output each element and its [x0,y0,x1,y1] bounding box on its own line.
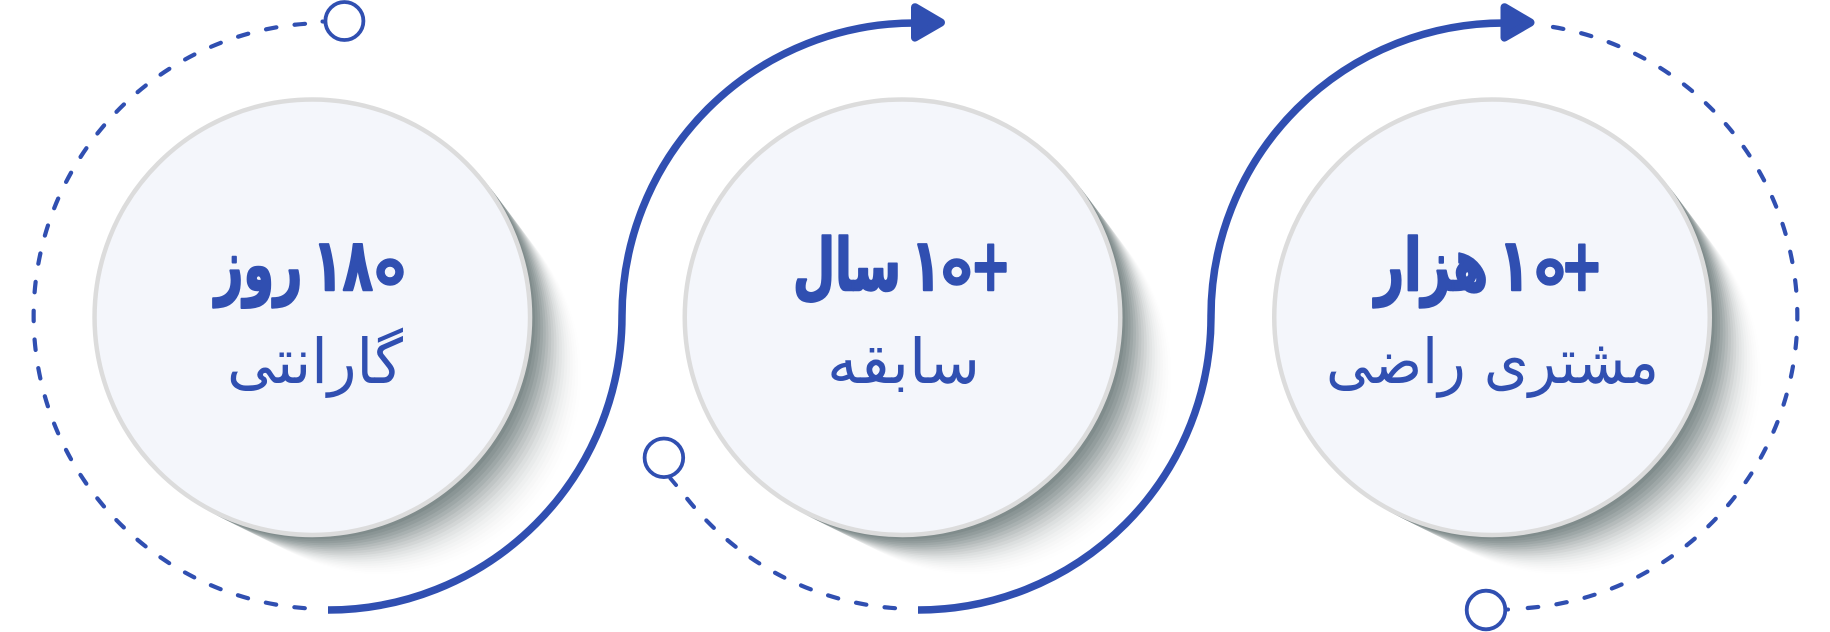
stat label: guarantee: گارانتی [227,325,403,398]
circle disc [95,99,530,535]
digit zero ring [947,262,966,282]
dashed arc: left loop with start node [34,2,363,608]
circle shadow [688,102,1171,574]
digit zero ring [1540,262,1560,282]
circle disc [1274,99,1710,535]
circle disc [685,99,1120,535]
panel: 10+ thousand satisfied customers [1274,99,1761,574]
arrow: solid S-curve from second to third loop [918,7,1530,610]
stat label: satisfied customers: مشتری راضی [1326,325,1659,398]
circle shadow [1277,102,1761,574]
panel: 180 days guarantee [95,99,581,574]
circle shadow [97,102,581,574]
panel: 10+ years of experience [685,99,1171,574]
stat value: 10+ years: +۱۰ سال [793,223,1011,307]
arrow: solid S-curve from first to second loop [328,7,941,610]
stat label: experience: سابقه [827,325,980,398]
dashed arc: middle loop with node [645,438,895,608]
stat value: 180 days: ۱۸۰ روز [213,223,403,308]
dashed arc: right loop with node [1467,27,1797,629]
stat value: 10+ thousand: +۱۰ هزار [1373,223,1603,308]
digit zero ring [380,262,400,282]
